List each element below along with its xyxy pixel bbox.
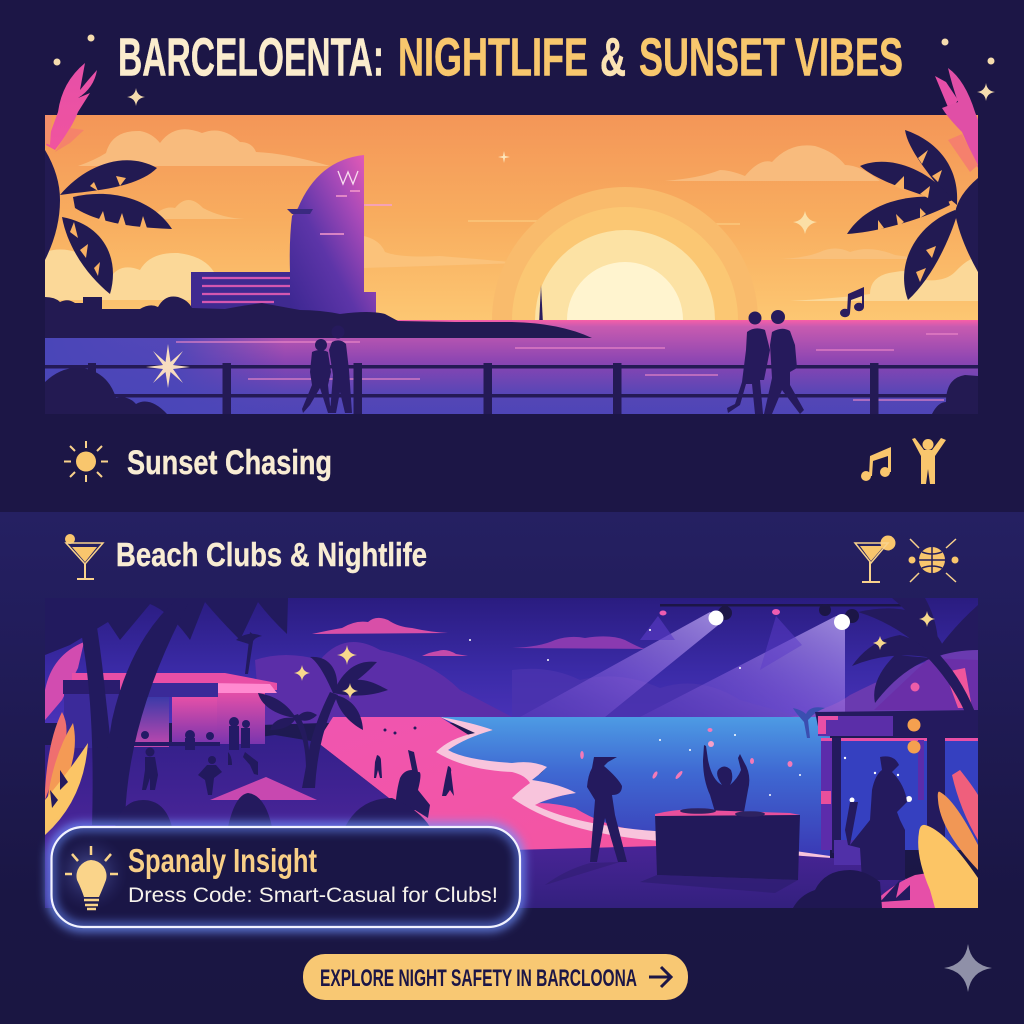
palm right serrations [878,150,942,282]
night sky [45,598,978,723]
booth [815,710,978,900]
sea [440,717,830,858]
corner sparkle [944,944,992,992]
fence [45,363,978,414]
big sparkle [146,344,190,388]
icon: sun [64,441,108,482]
dark palm top right [852,598,978,712]
title [118,28,903,88]
mid palms [258,657,388,788]
insight body: Dress Code: Smart-Casual for Clubs! [128,883,498,907]
section heading: beach clubs [65,534,427,579]
icon: arrow [649,967,671,987]
stage lights and beams [520,604,910,717]
decorative stars [54,34,995,106]
dancers near bar [142,748,258,795]
beach bar building [63,673,277,750]
ground left [45,735,978,908]
hills [512,669,702,692]
button: explore: EXPLORE NIGHT SAFETY IN BARCLOONA [320,965,637,992]
callout: insight [51,827,520,927]
palm left [45,150,172,294]
tiny sky sparkle [498,151,510,163]
big pink leaf behind bar [45,642,84,720]
booth patron silhouette [845,756,907,880]
clouds [312,618,645,656]
title: BARCELOENTA: [118,28,384,88]
button: explore [303,954,688,1000]
sand [320,717,806,856]
couple walking right [727,310,804,414]
bushes right [932,375,978,414]
palm left serrations [70,176,147,276]
right foreground leaves [868,770,978,908]
title: NIGHTLIFE [398,28,588,88]
title: SUNSET VIBES [639,28,903,88]
palm right [847,130,978,300]
woman silhouette [545,757,627,885]
DJ silhouette [703,745,749,812]
icon: light bulb [65,846,118,909]
W hotel tower [191,155,392,316]
sea [45,320,978,414]
bushes left [45,368,167,414]
shoreline skyline [45,296,592,338]
pink dune [210,777,317,800]
sun [492,187,758,320]
foreground mound right [793,870,882,908]
foreground mounds left [115,793,430,827]
dark palms top left [45,598,288,825]
heading text: Sunset Chasing [127,444,332,482]
icon: cocktail with citrus [855,536,896,582]
leaves: top left corner [45,63,97,152]
sky sparkle [793,211,817,234]
couple walking left [302,326,352,413]
confetti [469,629,821,796]
sparkles [294,611,935,699]
shoreline foam [436,717,830,859]
small palm by booth [793,707,825,738]
heading text: Beach Clubs & Nightlife [116,536,427,573]
orange leaves left [45,712,88,835]
icon: cocktail [65,534,103,579]
clouds [45,129,978,301]
section heading: sunset chasing [64,441,332,482]
panel: sunset scene [45,115,978,414]
music note in sky [840,287,864,317]
icon: dancing person [912,438,946,484]
leaves: top right corner [935,68,978,172]
beach people [374,726,454,820]
icon: disco ball [908,539,958,582]
icon: music note [861,447,891,481]
panel: beach club night scene [45,598,978,908]
distant sail mast [539,286,543,320]
title: & [600,28,626,88]
DJ table [640,808,800,893]
sky [45,115,978,325]
insight title: Spanaly Insight [128,842,317,879]
